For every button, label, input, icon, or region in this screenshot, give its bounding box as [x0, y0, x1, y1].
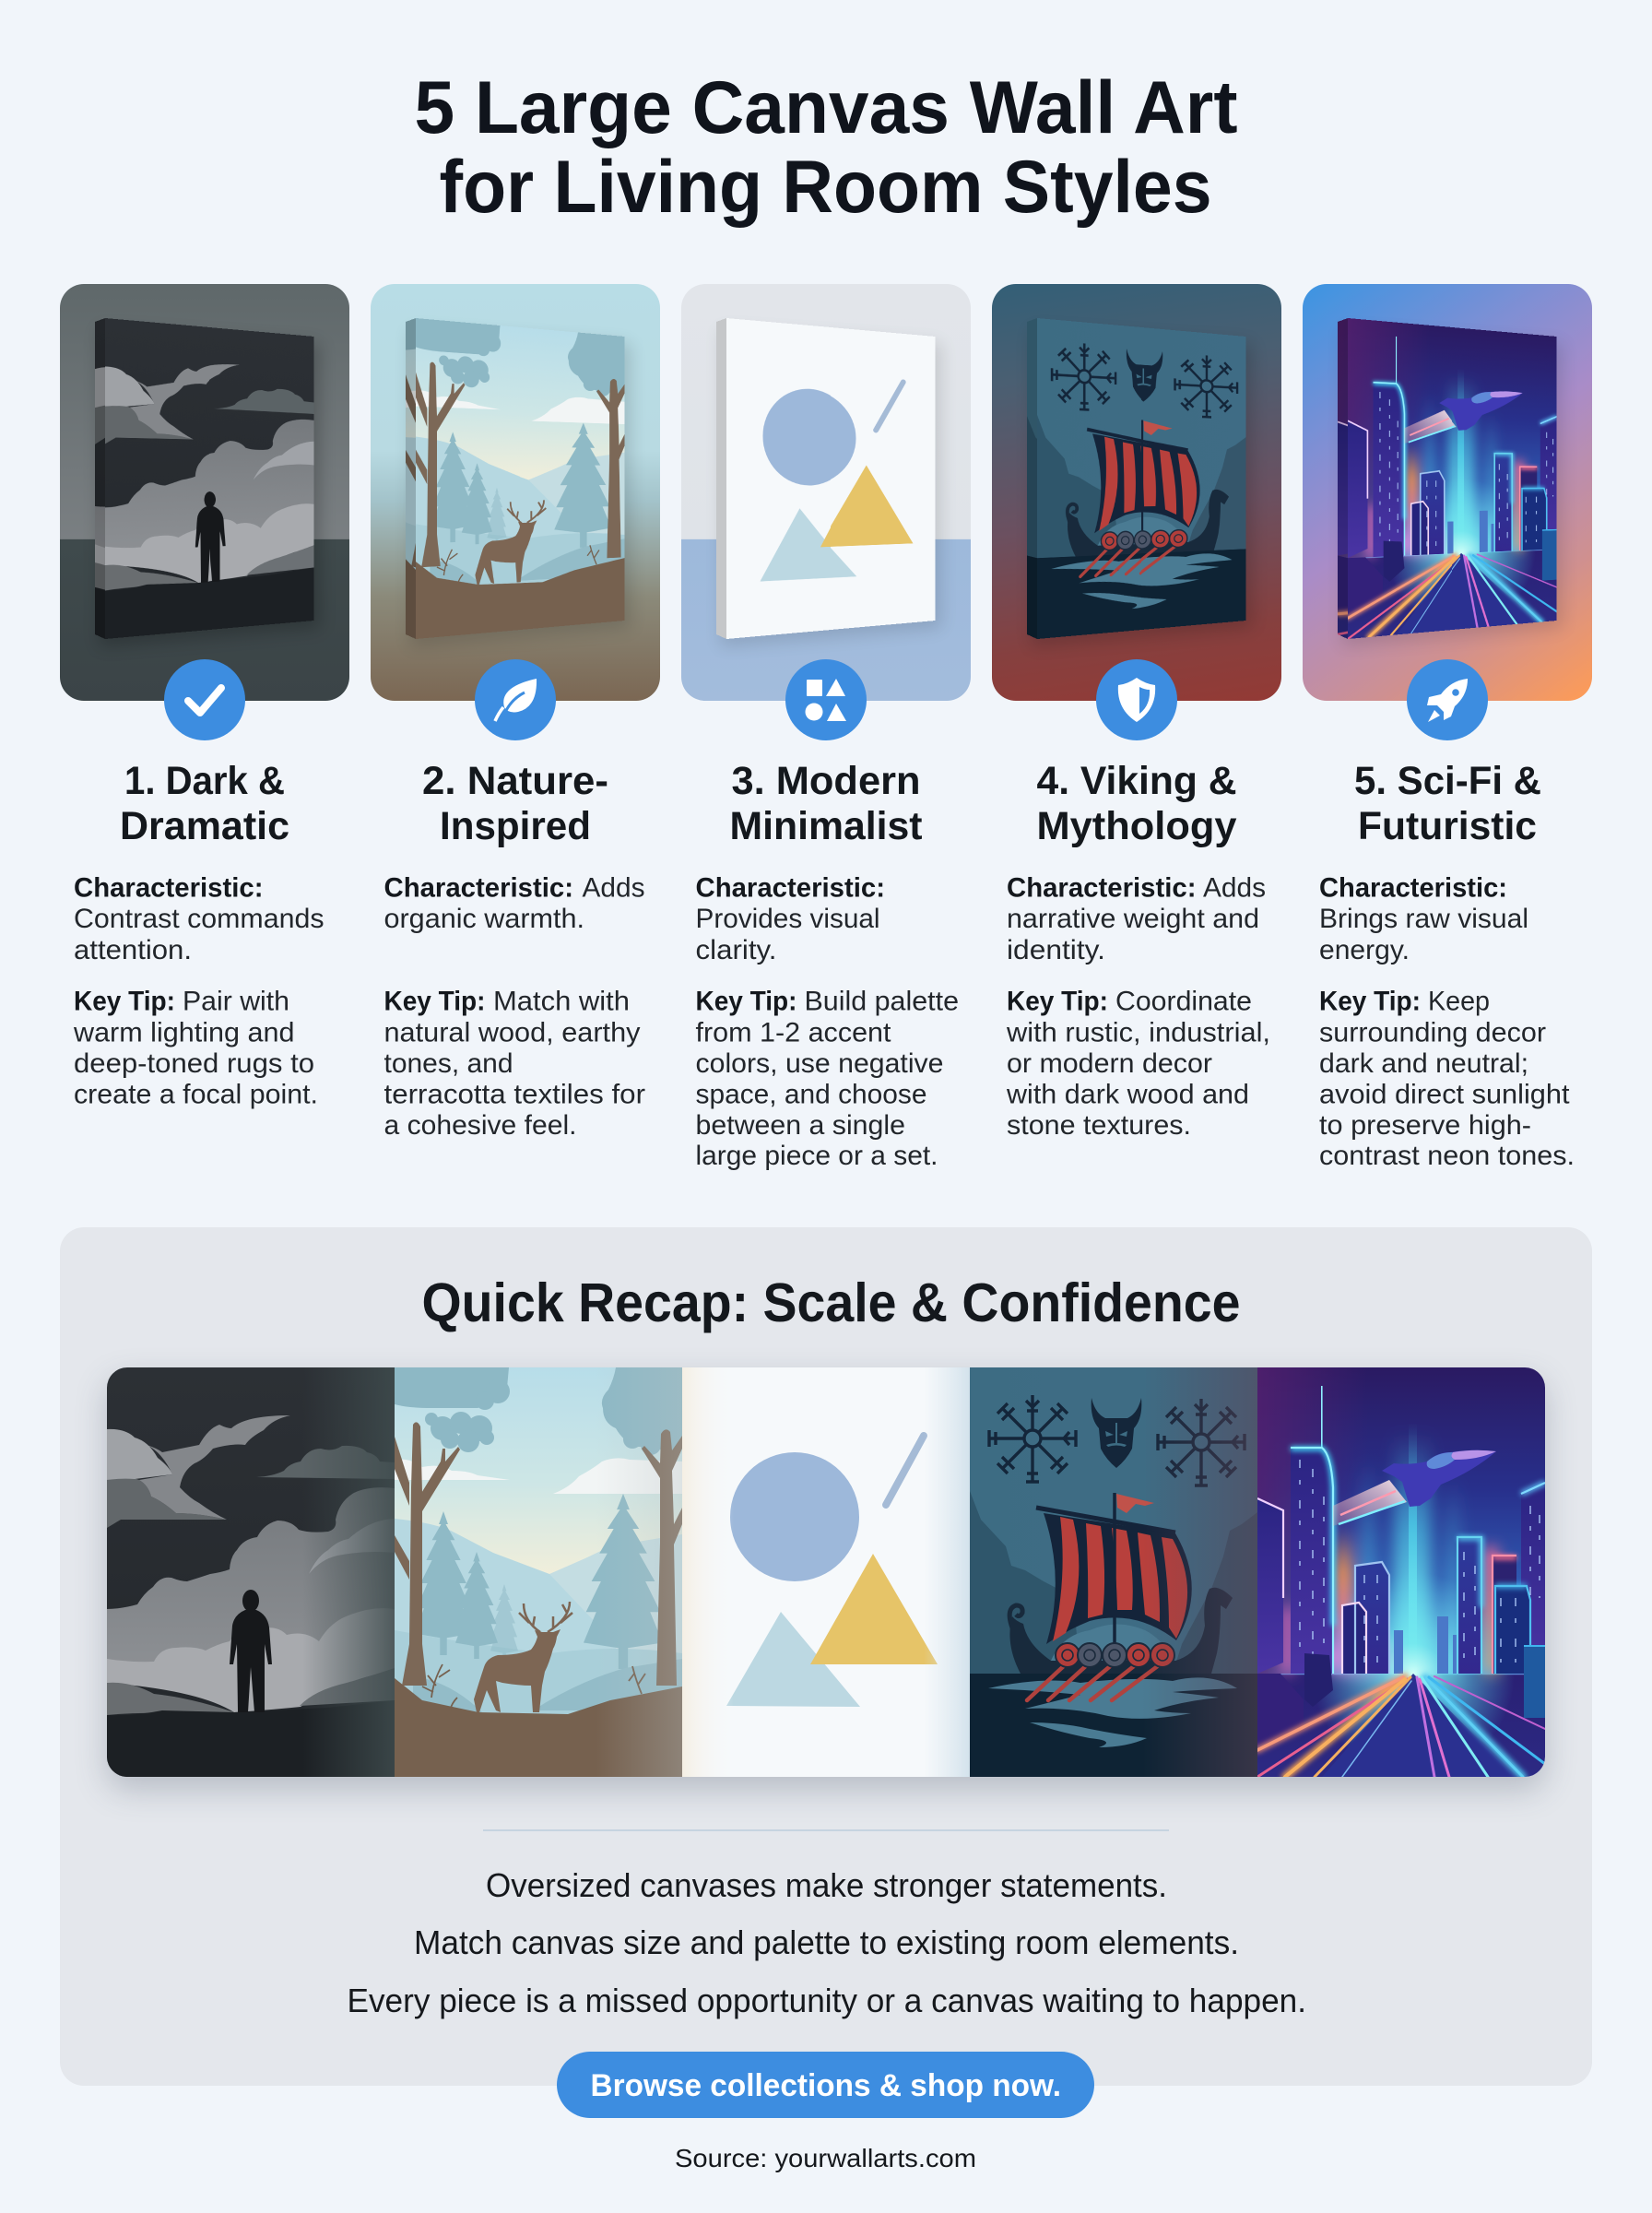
- text: characteristic and key tip: Provides visual: [695, 904, 879, 934]
- text: characteristic and key tip: Brings raw visual: [1319, 904, 1528, 934]
- panel: style 5 sci-fi and futuristic: [1303, 284, 1592, 1171]
- text: characteristic and key tip: [695, 872, 959, 1171]
- title: 5 Large Canvas Wall Art: [415, 66, 1237, 149]
- text: characteristic and key tip: colors, use negative: [695, 1048, 944, 1079]
- text: characteristic and key tip: or modern decor: [1007, 1048, 1212, 1079]
- text: characteristic and key tip: space, and choose: [695, 1079, 927, 1110]
- panel: style 4 viking and mythology: [992, 284, 1281, 1141]
- panel: style 1 dark and dramatic: [60, 284, 349, 1110]
- source line: Source: yourwallarts.com: [675, 2144, 976, 2172]
- text: characteristic and key tip: Coordinate: [1115, 987, 1252, 1016]
- text: characteristic and key tip: Adds: [583, 872, 645, 904]
- button: browse collections: Browse collections & shop now.: [590, 2068, 1061, 2103]
- text: characteristic and key tip: Key Tip:: [74, 987, 175, 1016]
- text: characteristic and key tip: Characteristic:: [695, 872, 885, 904]
- text: characteristic and key tip: Match with: [493, 987, 630, 1016]
- text: characteristic and key tip: identity.: [1007, 935, 1105, 965]
- text: characteristic and key tip: clarity.: [695, 935, 776, 965]
- text: characteristic and key tip: dark and neutral;: [1319, 1048, 1528, 1079]
- text: characteristic and key tip: [73, 872, 324, 1110]
- icon: shield: [1096, 659, 1177, 740]
- text: characteristic and key tip: to preserve high-: [1319, 1110, 1531, 1141]
- heading: 4. Viking & Mythology: [1036, 759, 1237, 848]
- text: recap statements: Oversized canvases make stronger statements.: [486, 1866, 1167, 1904]
- canvas: dark and dramatic: [107, 1367, 395, 1777]
- panel: style 3 modern minimalist: [681, 284, 971, 1171]
- text: characteristic and key tip: terracotta textiles for: [384, 1079, 645, 1110]
- panel: style 2 nature-inspired: [371, 284, 660, 1141]
- text: characteristic and key tip: Key Tip:: [384, 987, 485, 1016]
- text: characteristic and key tip: contrast neon tones.: [1319, 1141, 1575, 1171]
- heading: 5. Sci-Fi & Futuristic: [1303, 750, 1592, 860]
- text: characteristic and key tip: Key Tip:: [1007, 987, 1108, 1016]
- text: characteristic and key tip: stone textures.: [1007, 1110, 1191, 1141]
- title: for Living Room Styles: [439, 146, 1211, 229]
- text: characteristic and key tip: energy.: [1319, 935, 1410, 965]
- text: characteristic and key tip: large piece or a set.: [695, 1141, 938, 1171]
- icon: check mark: [164, 659, 245, 740]
- canvas: nature-inspired: [395, 1367, 682, 1777]
- text: characteristic and key tip: attention.: [74, 935, 192, 965]
- heading: 4. Viking & Mythology: 4. Viking &: [1036, 759, 1237, 803]
- heading: 4. Viking & Mythology: Mythology: [1036, 804, 1237, 848]
- text: characteristic and key tip: Build palette: [804, 987, 959, 1016]
- text: characteristic and key tip: [1006, 872, 1270, 1141]
- button: browse collections: [557, 2052, 1094, 2118]
- canvas: sci-fi and futuristic: [1257, 1367, 1545, 1777]
- heading: 3. Modern Minimalist: 3. Modern: [732, 759, 920, 803]
- text: characteristic and key tip: organic warmth.: [384, 904, 584, 934]
- card: minimalist canvas mockup: [681, 284, 971, 701]
- text: characteristic and key tip: natural wood, earthy: [384, 1018, 641, 1047]
- icon: geometric shapes: [785, 659, 867, 740]
- text: characteristic and key tip: Characteristic:: [1007, 872, 1197, 904]
- card: dark canvas mockup: [60, 284, 349, 701]
- heading: 5. Sci-Fi & Futuristic: Futuristic: [1358, 804, 1537, 848]
- text: characteristic and key tip: surrounding decor: [1319, 1018, 1546, 1047]
- text: characteristic and key tip: warm lighting and: [73, 1018, 295, 1047]
- text: characteristic and key tip: narrative weight and: [1007, 904, 1259, 934]
- image strip: five canvas styles: [107, 1367, 1545, 1777]
- text: characteristic and key tip: Characteristic:: [1319, 872, 1507, 904]
- heading: 2. Nature-Inspired: 2. Nature-: [422, 759, 608, 803]
- heading: 1. Dark & Dramatic: Dramatic: [120, 804, 289, 848]
- card: viking canvas mockup: [992, 284, 1281, 701]
- text: characteristic and key tip: create a focal point.: [74, 1079, 318, 1110]
- text: characteristic and key tip: deep-toned rugs to: [74, 1048, 314, 1079]
- icon: leaf: [475, 659, 556, 740]
- heading: 2. Nature-Inspired: [422, 759, 608, 848]
- text: recap statements: Every piece is a missed opportunity or a canvas waiting to happen.: [347, 1982, 1306, 2019]
- text: characteristic and key tip: Contrast commands: [74, 904, 324, 934]
- canvas: viking and mythology: [970, 1367, 1257, 1777]
- text: characteristic and key tip: tones, and: [384, 1048, 513, 1079]
- text: characteristic and key tip: with rustic, industrial,: [1006, 1018, 1270, 1047]
- heading: 1. Dark & Dramatic: 1. Dark &: [124, 759, 285, 803]
- heading: 1. Dark & Dramatic: [120, 759, 289, 848]
- text: characteristic and key tip: between a single: [695, 1110, 905, 1141]
- card: nature canvas mockup: [371, 284, 660, 701]
- text: characteristic and key tip: Pair with: [183, 987, 289, 1016]
- text: characteristic and key tip: Key Tip:: [695, 987, 796, 1016]
- text: characteristic and key tip: Key Tip:: [1319, 987, 1421, 1016]
- text: characteristic and key tip: [384, 872, 645, 1141]
- text: characteristic and key tip: Characteristic:: [384, 872, 573, 904]
- panel: quick recap: [60, 1227, 1592, 2086]
- heading: 5. Sci-Fi & Futuristic: 5. Sci-Fi &: [1354, 759, 1541, 803]
- text: characteristic and key tip: avoid direct sunlight: [1319, 1079, 1569, 1110]
- text: characteristic and key tip: Characteristic:: [74, 872, 264, 904]
- canvas: modern minimalist: [682, 1367, 970, 1777]
- heading: 3. Modern Minimalist: [730, 759, 922, 848]
- heading: 3. Modern Minimalist: Minimalist: [730, 804, 922, 848]
- text: characteristic and key tip: Keep: [1428, 987, 1490, 1016]
- text: characteristic and key tip: [1303, 870, 1592, 1178]
- text: recap statements: Match canvas size and palette to existing room elements.: [414, 1923, 1239, 1961]
- heading: quick recap: Quick Recap: Scale & Confidence: [422, 1272, 1241, 1333]
- text: characteristic and key tip: with dark wood and: [1006, 1079, 1249, 1110]
- icon: rocket: [1407, 659, 1488, 740]
- text: recap statements: [336, 1854, 1316, 2030]
- text: characteristic and key tip: from 1-2 accent: [695, 1018, 891, 1047]
- text: characteristic and key tip: Adds: [1203, 872, 1266, 904]
- heading: 2. Nature-Inspired: Inspired: [440, 804, 591, 848]
- text: characteristic and key tip: a cohesive feel.: [384, 1110, 577, 1141]
- title: [415, 66, 1237, 229]
- card: sci-fi canvas mockup: [1303, 284, 1592, 701]
